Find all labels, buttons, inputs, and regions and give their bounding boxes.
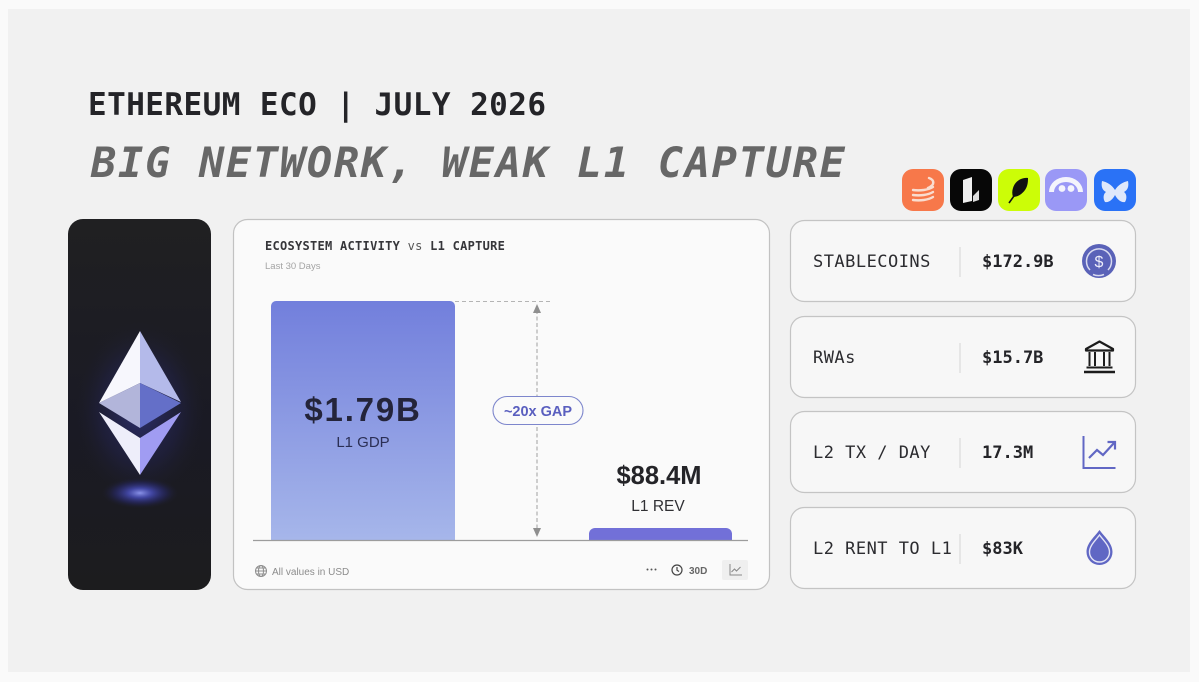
chart footer	[256, 560, 748, 580]
light pool under logo	[100, 477, 180, 509]
panel: ethereum logo card	[68, 219, 211, 590]
bar: L1 REV: L1 REV	[631, 498, 685, 515]
bar: L1 GDP	[271, 301, 455, 540]
panel: L2 TX per day	[790, 412, 1136, 492]
icon: orange stacked coins	[902, 169, 944, 211]
callout: gap: ~20x GAP	[504, 404, 572, 420]
icon: blue butterfly	[1094, 169, 1136, 211]
icon: clock	[672, 565, 682, 575]
panel: L2 rent to L1: L2 RENT TO L1	[813, 539, 952, 559]
title: ETHEREUM ECO | JULY 2026	[88, 87, 546, 123]
bar: L1 GDP: L1 GDP	[336, 434, 390, 451]
chart heading: ECOSYSTEM ACTIVITY vs L1 CAPTURE	[265, 239, 505, 253]
panel: L2 rent to L1: $83K	[982, 539, 1024, 559]
baseline	[253, 540, 748, 542]
callout: gap	[493, 396, 583, 424]
title	[88, 87, 847, 187]
chart footer: 30D	[689, 566, 707, 577]
arrow: gap height	[533, 304, 541, 537]
bar chart	[253, 301, 748, 540]
icon: chart toggle	[722, 560, 748, 580]
panel: stablecoins: STABLECOINS	[813, 252, 931, 272]
icon: ethereum diamond	[99, 331, 181, 475]
panel: chart card	[234, 220, 770, 590]
bar: L1 REV: $88.4M	[616, 462, 702, 490]
protocol logo row	[902, 169, 1136, 211]
icon: black L logo	[950, 169, 992, 211]
icon: dollar coin	[1082, 244, 1116, 278]
icon: line chart up	[1084, 436, 1116, 468]
chart footer: All values in USD	[272, 567, 349, 578]
panel: L2 TX per day: L2 TX / DAY	[813, 443, 931, 463]
bar: L1 REV	[589, 462, 732, 540]
icon: more dots	[646, 568, 656, 570]
icon: globe	[256, 566, 266, 576]
bar: L1 GDP: $1.79B	[304, 391, 422, 428]
icon: lavender arch	[1045, 169, 1087, 211]
icon: lime feather	[998, 169, 1040, 211]
icon: dollar coin: $	[1095, 254, 1104, 271]
panel: RWAs	[790, 316, 1136, 398]
panel: RWAs: $15.7B	[982, 348, 1043, 368]
icon: bank	[1084, 342, 1115, 372]
title: BIG NETWORK, WEAK L1 CAPTURE	[90, 138, 847, 187]
panel: stablecoins: $172.9B	[982, 252, 1054, 272]
panel: L2 TX per day: 17.3M	[982, 443, 1033, 463]
icon: water drop	[1086, 530, 1112, 565]
panel: stablecoins	[790, 220, 1136, 302]
panel: L2 rent to L1	[790, 508, 1136, 588]
chart subtitle: Last 30 Days	[265, 261, 321, 272]
ethereum glow	[72, 318, 208, 502]
panel: RWAs: RWAs	[813, 348, 856, 368]
